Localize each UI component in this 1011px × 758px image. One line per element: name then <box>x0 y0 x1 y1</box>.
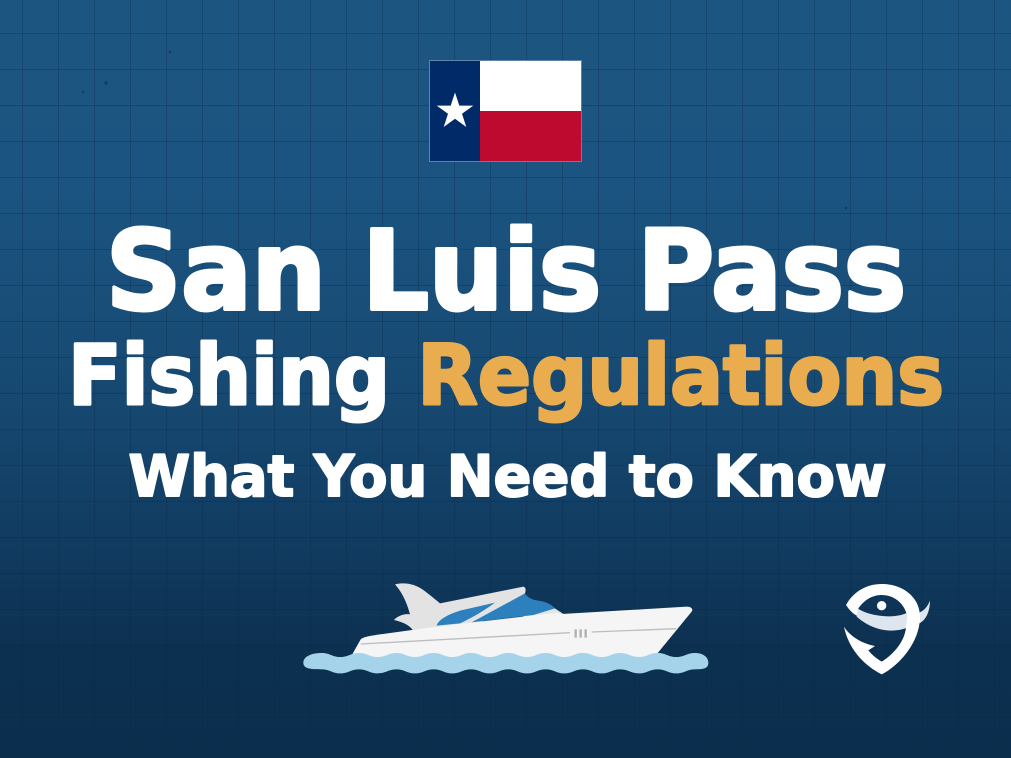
title: Fishing Regulations: Fishing Regulations <box>68 327 944 424</box>
boat rear deck <box>523 607 565 620</box>
boat windows <box>437 593 555 626</box>
icon: boat on waves <box>303 583 708 673</box>
boat hull stripe and vents <box>361 629 676 644</box>
waves <box>303 653 708 673</box>
logo band and tail <box>857 601 930 631</box>
title: San Luis Pass: San Luis Pass <box>106 207 906 335</box>
boat hull <box>350 607 692 658</box>
subtitle: What You Need to Know: What You Need to Know <box>128 444 886 510</box>
boat flybridge and fin <box>394 583 526 630</box>
logo body and hook <box>844 584 920 674</box>
logo eye <box>877 601 886 610</box>
icon: Texas flag <box>430 60 582 162</box>
icon: fish hook logo <box>844 584 930 674</box>
